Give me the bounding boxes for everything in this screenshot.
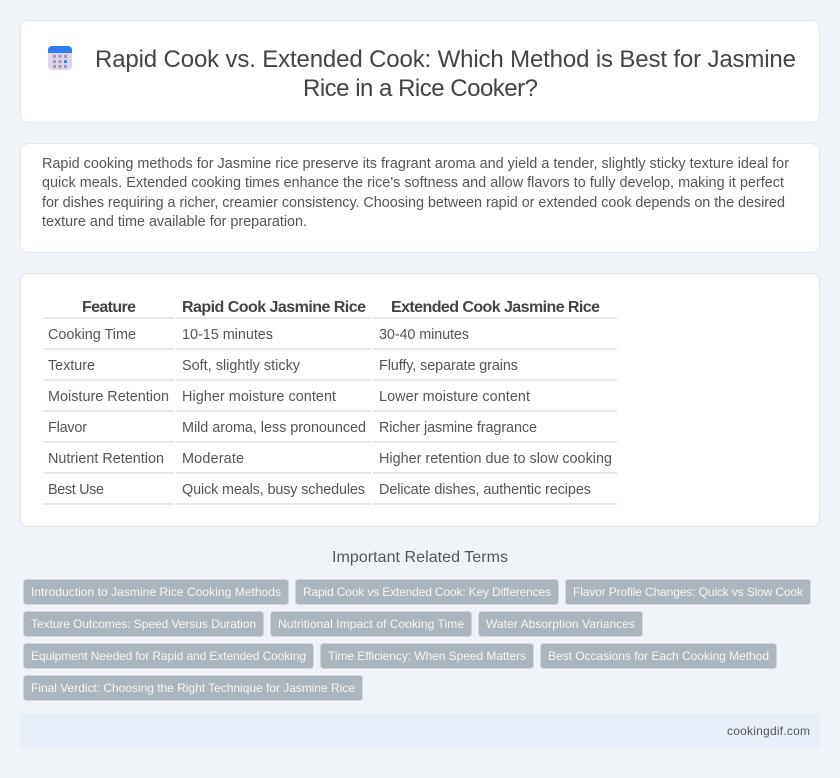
tag: [24, 676, 362, 700]
panel: introduction text: [20, 144, 820, 252]
row: flavor: Flavor: [48, 420, 87, 436]
tag: [24, 612, 264, 636]
tag: [566, 580, 810, 604]
tag list: related terms: [24, 580, 810, 700]
row: nutrient retention: Higher retention due to slow cooking: [379, 451, 612, 467]
row: nutrient retention: [48, 451, 612, 467]
tag: Equipment Needed for Rapid and Extended Cooking: [31, 649, 306, 663]
table header: Feature: [82, 299, 136, 316]
panel: introduction text: Rapid cooking methods for Jasmine rice preserve its fragrant aroma and yield a tender, slightly sticky texture ideal for: [42, 156, 789, 172]
tag: Texture Outcomes: Speed Versus Duration: [31, 617, 256, 631]
footer bar: [20, 714, 820, 748]
panel: introduction text: for dishes requiring a richer, creamier consistency. Choosing between rapid or extended cook depends on the desired: [42, 195, 785, 211]
row: moisture retention: Lower moisture content: [379, 389, 530, 405]
title: Rice in a Rice Cooker?: [303, 75, 538, 102]
panel: comparison table: [20, 274, 820, 526]
row: cooking time: 30-40 minutes: [379, 327, 469, 343]
panel: title card: [20, 20, 820, 122]
tag: Nutritional Impact of Cooking Time: [278, 617, 464, 631]
row: nutrient retention: Moderate: [182, 451, 244, 467]
footer bar: cookingdif.com: [727, 724, 810, 738]
row: moisture retention: [48, 389, 530, 405]
row: moisture retention: Higher moisture content: [182, 389, 336, 405]
tag: Flavor Profile Changes: Quick vs Slow Cook: [573, 585, 804, 599]
tag: [540, 644, 776, 668]
row: cooking time: [48, 327, 469, 343]
row: flavor: [48, 420, 537, 436]
title: Rapid Cook vs. Extended Cook: Which Method is Best for Jasmine: [95, 46, 796, 73]
tag: Introduction to Jasmine Rice Cooking Methods: [31, 585, 281, 599]
table header: [82, 299, 600, 316]
tag: Best Occasions for Each Cooking Method: [548, 649, 769, 663]
tag: [296, 580, 558, 604]
row: cooking time: 10-15 minutes: [182, 327, 273, 343]
row: moisture retention: Moisture Retention: [48, 389, 169, 405]
row: best use: Delicate dishes, authentic recipes: [379, 482, 591, 498]
table header: Rapid Cook Jasmine Rice: [182, 299, 366, 316]
row: best use: Quick meals, busy schedules: [182, 482, 365, 498]
row: nutrient retention: Nutrient Retention: [48, 451, 164, 467]
row: texture: Soft, slightly sticky: [182, 358, 301, 374]
row: cooking time: Cooking Time: [48, 327, 136, 343]
heading: related terms: Important Related Terms: [332, 549, 508, 566]
tag: Time Efficiency: When Speed Matters: [328, 649, 526, 663]
tag: [24, 580, 288, 604]
tag: Final Verdict: Choosing the Right Technique for Jasmine Rice: [31, 681, 355, 695]
row: flavor: Richer jasmine fragrance: [379, 420, 537, 436]
panel: introduction text: texture and time available for preparation.: [42, 214, 307, 230]
row: best use: [48, 482, 591, 498]
tag: [320, 644, 534, 668]
row: texture: [48, 358, 518, 374]
tag: Rapid Cook vs Extended Cook: Key Differences: [303, 585, 551, 599]
row: texture: Texture: [48, 358, 95, 374]
row: texture: Fluffy, separate grains: [379, 358, 518, 374]
row: best use: Best Use: [48, 482, 104, 498]
row: flavor: Mild aroma, less pronounced: [182, 420, 366, 436]
table header: Extended Cook Jasmine Rice: [391, 299, 600, 316]
title: [95, 46, 796, 102]
tag: [24, 644, 314, 668]
tag: [478, 612, 642, 636]
panel: introduction text: quick meals. Extended cooking times enhance the rice's softness and allow flavors to fully develop, making it perfect: [42, 175, 784, 191]
tag: [270, 612, 472, 636]
tag: Water Absorption Variances: [486, 617, 635, 631]
icon: calendar: [48, 46, 72, 70]
